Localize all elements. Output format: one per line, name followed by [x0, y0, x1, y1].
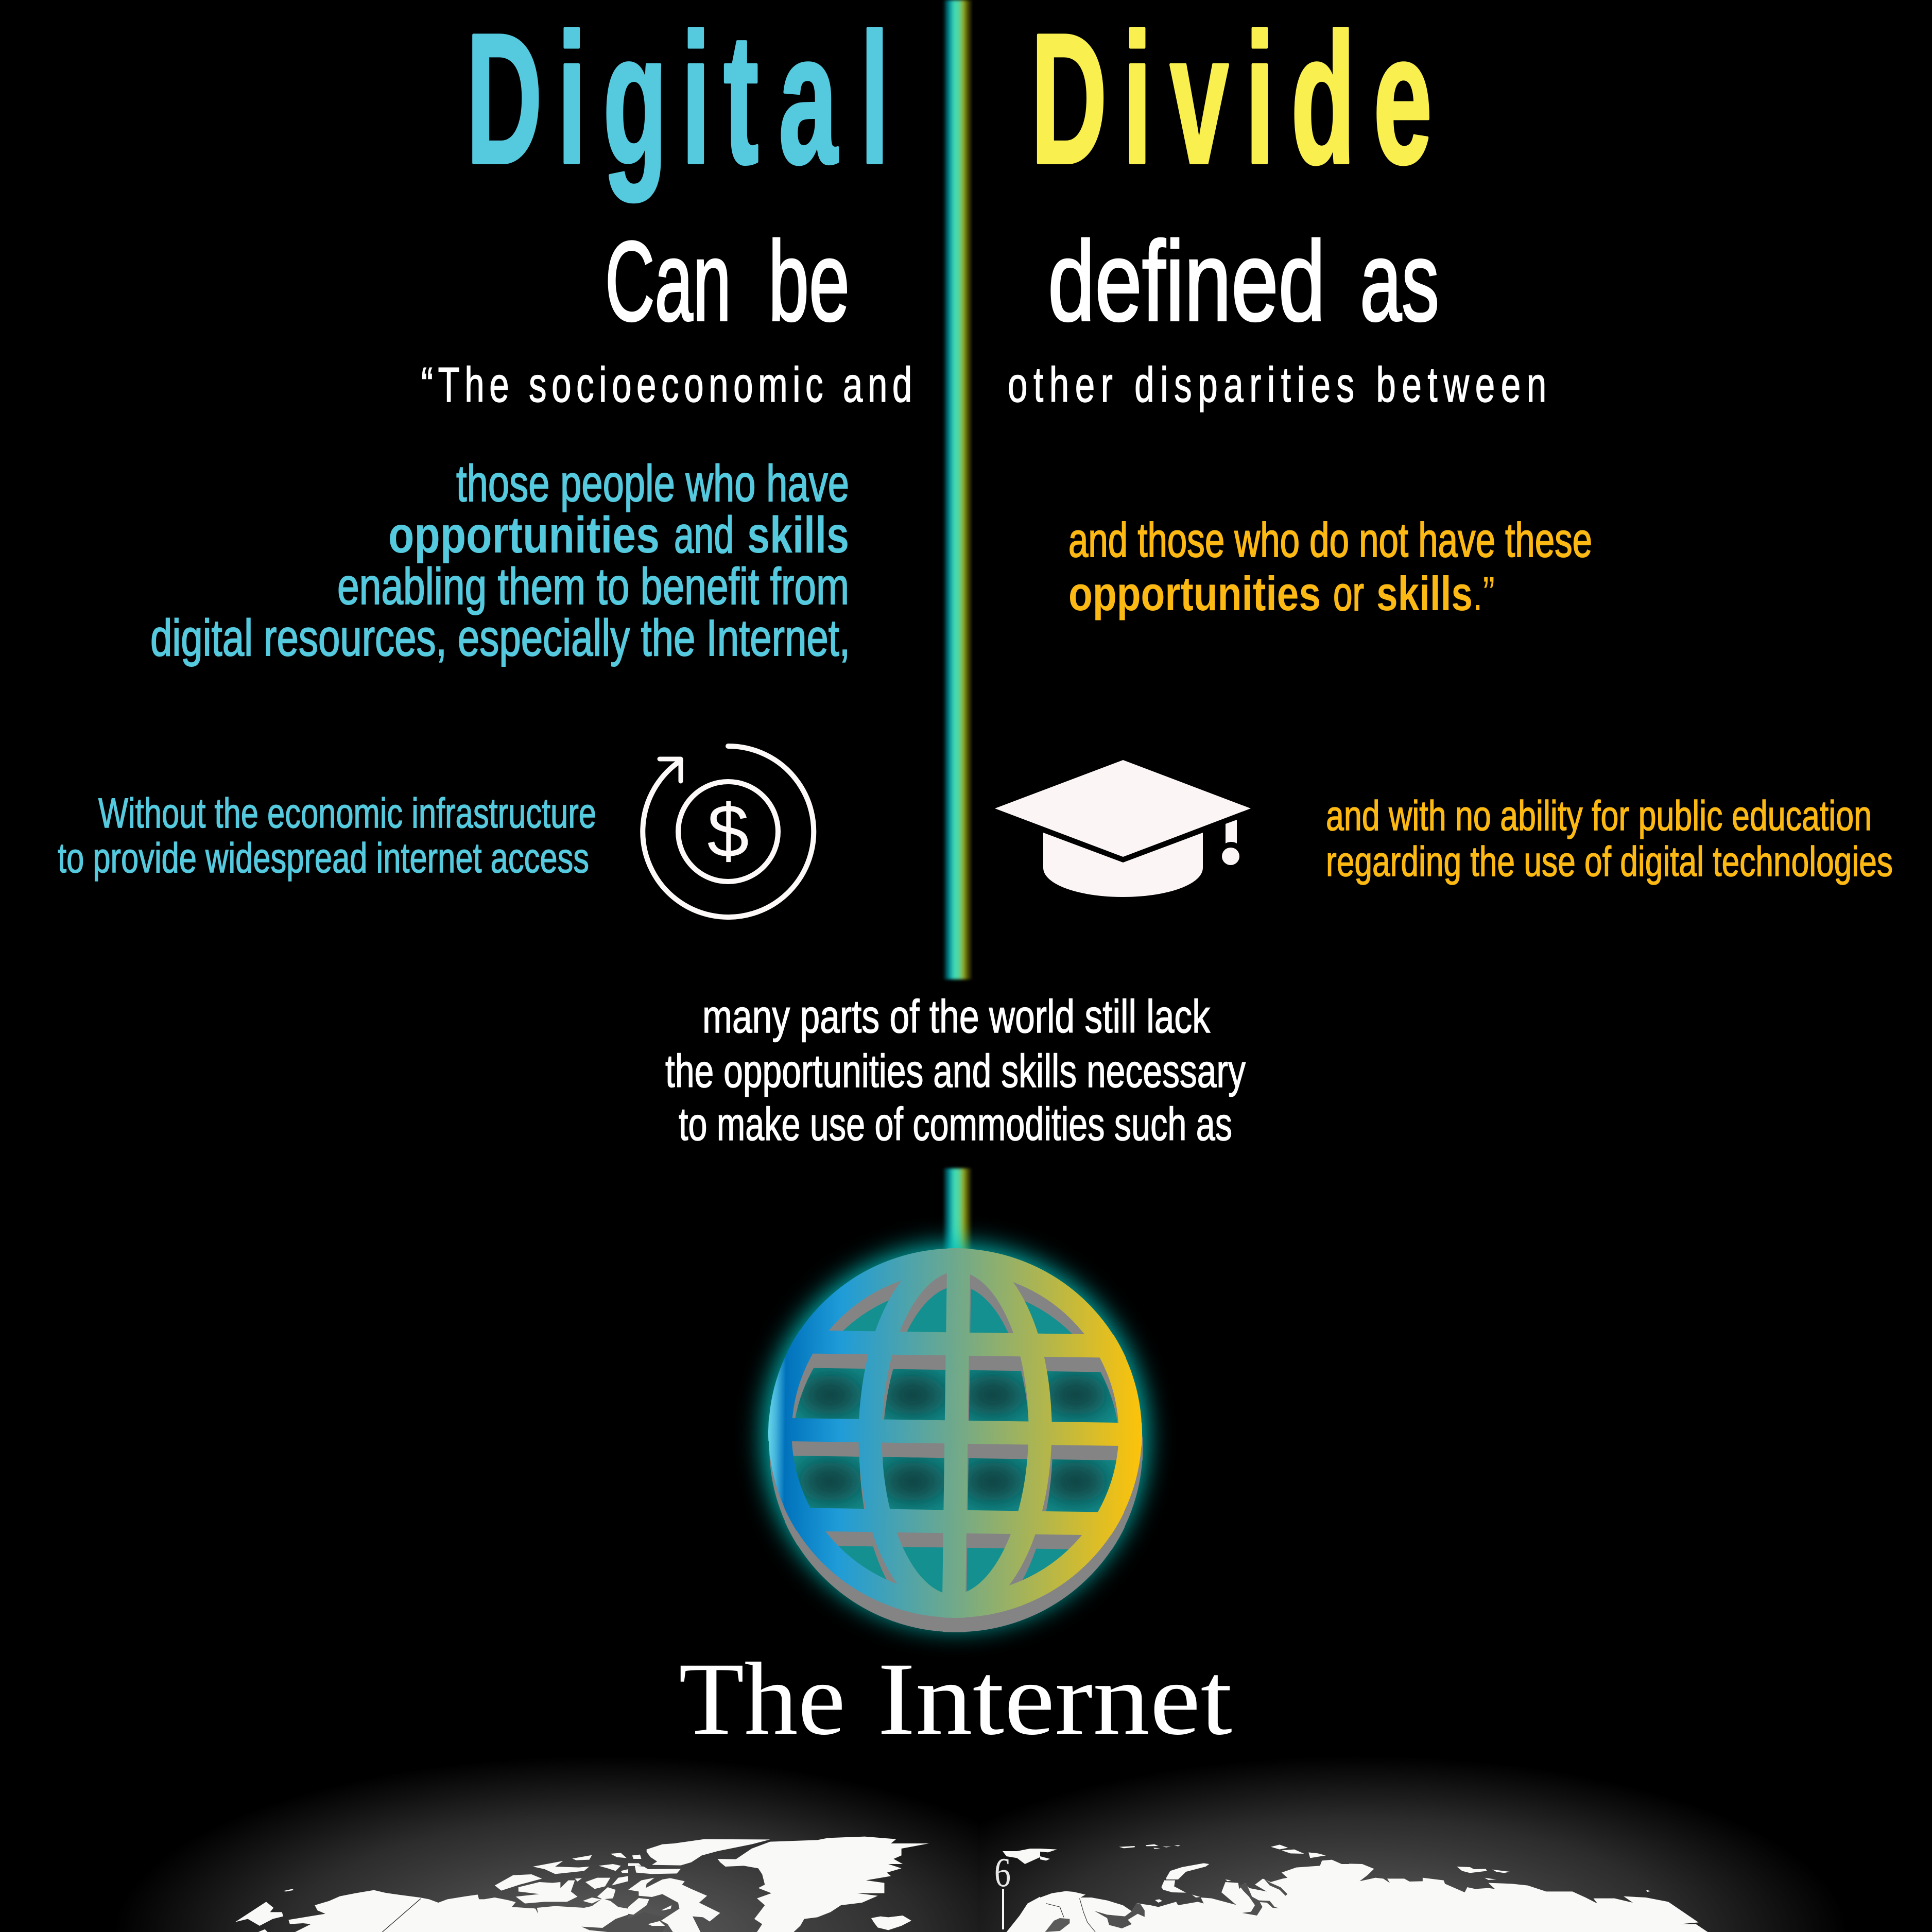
public education text — [1326, 792, 1893, 885]
icon: globe — [764, 1245, 1147, 1635]
centre statement text: many parts of the world still lack — [702, 991, 1211, 1043]
icon: dollar cycle — [643, 746, 814, 917]
world map silhouette — [235, 1837, 1707, 1932]
blue text block: digital resources, especially the Internet, — [150, 609, 850, 667]
centre statement text: the opportunities and skills necessary — [665, 1046, 1246, 1097]
title: Digital: Digital — [466, 0, 889, 203]
title: Divide: Divide — [1031, 0, 1432, 202]
blue text block: opportunities — [388, 506, 660, 564]
subtitle left: be — [768, 218, 850, 344]
subtitle right: as — [1360, 218, 1439, 344]
icon: graduation cap — [995, 760, 1251, 897]
blue text block: skills — [747, 506, 849, 564]
vertical divider line, lower — [942, 1168, 971, 1256]
centre statement text — [665, 991, 1246, 1150]
economic infrastructure text: to provide widespread internet access — [58, 835, 589, 882]
economic infrastructure text — [58, 790, 596, 882]
icon: dollar cycle: $ — [707, 789, 749, 873]
yellow text block: or — [1333, 566, 1364, 620]
heading: The Internet: Internet — [877, 1641, 1232, 1756]
subtitle right: defined — [1048, 218, 1325, 344]
yellow text block: .” — [1473, 566, 1495, 620]
yellow text block: skills — [1376, 566, 1473, 620]
blue text block — [150, 455, 850, 667]
map: northern Europe and western Russia — [1040, 1844, 1349, 1932]
yellow text block: opportunities — [1068, 566, 1321, 620]
yellow text block: and those who do not have these — [1068, 513, 1592, 567]
yellow text block — [1068, 513, 1592, 620]
subtitle left: Can — [605, 218, 731, 344]
heading: The Internet: The — [679, 1641, 846, 1756]
definition line left: “The socioeconomic and — [421, 357, 912, 412]
blue text block: and — [674, 506, 734, 564]
map: North America west — [235, 1853, 628, 1932]
page number rule — [1002, 1889, 1004, 1929]
blue text block: those people who have — [456, 455, 849, 512]
vertical divider line, upper — [943, 0, 972, 979]
definition line right: other disparities between — [1008, 357, 1546, 412]
map: Greenland and eastern Canada — [628, 1837, 1040, 1932]
blue text block: enabling them to benefit from — [337, 558, 849, 615]
centre statement text: to make use of commodities such as — [679, 1099, 1232, 1150]
heading: The Internet — [679, 1641, 1232, 1756]
page number: 6 — [994, 1849, 1011, 1895]
economic infrastructure text: Without the economic infrastructure — [98, 790, 596, 837]
map: eastern Russia — [1349, 1864, 1707, 1932]
bottom glow behind world map — [0, 1740, 1932, 1932]
